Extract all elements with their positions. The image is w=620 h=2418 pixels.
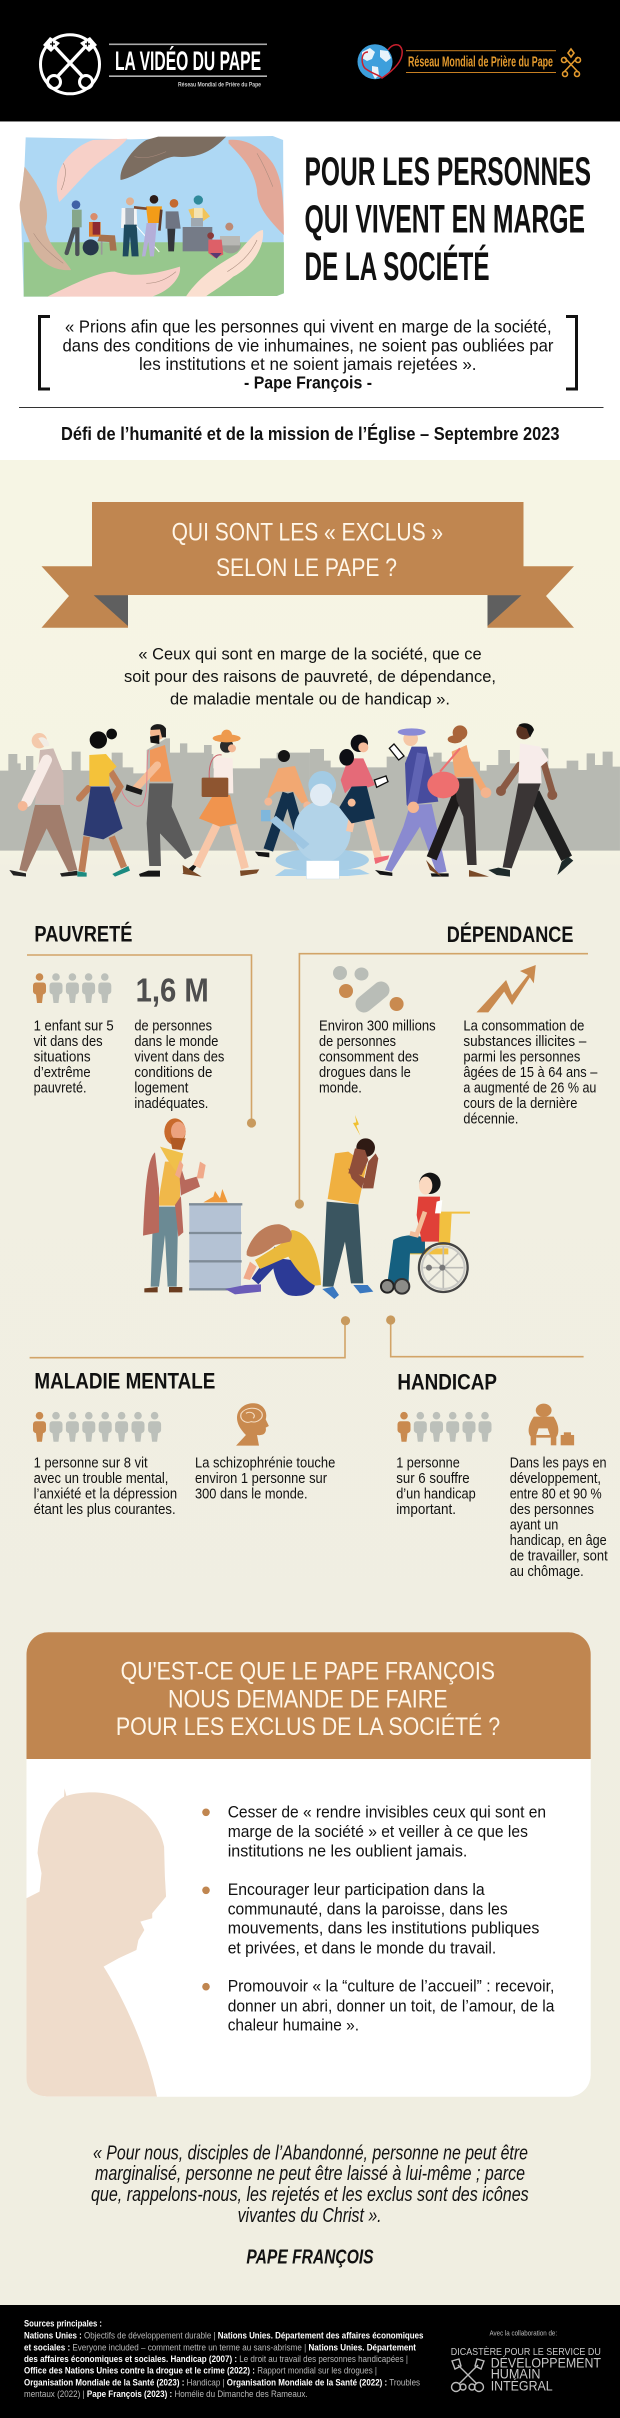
prayer quote in brackets <box>40 316 576 392</box>
text: unemployment: développement, <box>510 1470 601 1487</box>
partner: dicastery: INTÉGRAL <box>491 2378 553 2394</box>
bullet: encourage participation <box>202 1880 539 1957</box>
closing quote: PAPE FRANÇOIS <box>246 2246 374 2268</box>
text: drug users: monde. <box>319 1080 362 1097</box>
text: schizophrenia <box>195 1454 335 1502</box>
text: consumption increase: La consommation de <box>463 1018 584 1035</box>
logo: crossed keys <box>40 35 100 94</box>
text: consumption increase: a augmenté de 26 % au <box>463 1080 596 1097</box>
text: children in poverty <box>34 1018 114 1097</box>
figure: seated person with head on knees <box>225 1224 321 1296</box>
header band <box>0 0 620 122</box>
text: housing: logement <box>134 1080 189 1097</box>
text: one in six: important. <box>396 1501 456 1518</box>
title <box>304 150 591 289</box>
ribbon heading: QUI SONT LES « EXCLUS » <box>172 519 443 547</box>
sources <box>24 2319 424 2400</box>
text: consumption increase <box>463 1018 598 1128</box>
person: older man <box>9 733 77 877</box>
text: one in eight: l’anxiété et la dépression <box>34 1485 177 1502</box>
person: woman with hat and bag <box>183 730 259 877</box>
bullet: culture of welcome <box>202 1977 555 2035</box>
text: housing: dans le monde <box>134 1033 218 1050</box>
person: woman in pink <box>339 735 389 864</box>
text: one in six: d’un handicap <box>396 1485 476 1502</box>
text: unemployment: de travailler, sont <box>510 1547 608 1564</box>
panel heading: QU'EST-CE QUE LE PAPE FRANÇOIS <box>121 1657 495 1685</box>
ribbon heading: SELON LE PAPE ? <box>216 554 397 582</box>
quote: who are the excluded <box>124 644 496 708</box>
text: children in poverty: d’extrême <box>34 1064 91 1081</box>
partner: dicastery: Avec la collaboration de: <box>490 2329 557 2338</box>
heading: pauvreté: PAUVRETÉ <box>34 922 132 947</box>
subtitle: monthly intention: Défi de l’humanité et de la mission de l’Église – Septembre 2023 <box>61 423 560 444</box>
text: consumption increase: substances illicites – <box>463 1033 587 1050</box>
sources: mentaux (2022) | Pape François (2023) : Homélie du Dimanche des Rameaux. <box>24 2389 308 2400</box>
text: housing: conditions de <box>134 1064 212 1081</box>
text: consumption increase: décennie. <box>463 1111 518 1128</box>
text: consumption increase: parmi les personnes <box>463 1049 580 1066</box>
illustration: city skyline <box>0 738 620 851</box>
text: one in eight <box>34 1454 177 1518</box>
bullet: stop making invisible <box>202 1802 546 1860</box>
text: drug users: drogues dans le <box>319 1064 411 1081</box>
icon: keys <box>452 2359 484 2392</box>
sources: Organisation Mondiale de la Santé (2023) : Handicap | Organisation Mondiale de la Santé (2022) : Troubles <box>24 2377 420 2388</box>
text: unemployment: des personnes <box>510 1501 594 1518</box>
heading: maladie mentale: MALADIE MENTALE <box>34 1368 215 1393</box>
closing quote: que, rappelons-nous, les rejetés et les exclus sont des icônes <box>91 2184 529 2206</box>
section: poverty <box>27 922 256 1128</box>
heading: handicap: HANDICAP <box>397 1369 497 1394</box>
person: woman with red bag <box>426 725 491 877</box>
illustration: seated man in blue <box>261 771 370 879</box>
text: children in poverty: pauvreté. <box>34 1080 87 1097</box>
connector: mental illness line <box>30 1316 350 1358</box>
text: unemployment <box>510 1454 608 1580</box>
person: man in white t-shirt <box>488 723 573 877</box>
figure: homeless man and barrel <box>143 1118 242 1292</box>
brand: La Vidéo du Pape <box>109 44 267 88</box>
bullet: encourage participation: communauté, dans la paroisse, dans les <box>228 1899 508 1918</box>
section: mental illness <box>30 1316 350 1518</box>
bullet: encourage participation: Encourager leur participation dans la <box>228 1880 485 1899</box>
pictogram: 1 in 6 <box>398 1412 492 1442</box>
panel heading: NOUS DEMANDE DE FAIRE <box>168 1685 448 1713</box>
icon: rising arrow <box>476 965 536 1012</box>
bullet: encourage participation: mouvements, dans les institutions publiques <box>228 1919 539 1938</box>
text: drug users: consomment des <box>319 1049 419 1066</box>
text: unemployment: au chômage. <box>510 1563 584 1580</box>
bullet: encourage participation: et privées, et dans le monde du travail. <box>228 1938 496 1957</box>
panel heading: POUR LES EXCLUS DE LA SOCIÉTÉ ? <box>116 1712 500 1741</box>
text: housing: inadéquates. <box>134 1095 208 1112</box>
text: drug users <box>319 1018 436 1097</box>
bullet: culture of welcome: Promouvoir « la “culture de l’accueil” : recevoir, <box>228 1977 554 1996</box>
bullet: culture of welcome: donner un abri, donner un toit, de l’amour, de la <box>228 1996 555 2015</box>
text: unemployment: ayant un <box>510 1516 558 1533</box>
text: consumption increase: cours de la dernière <box>463 1095 577 1112</box>
icon: pills <box>333 966 404 1011</box>
footer <box>0 2305 620 2418</box>
icon: person with suitcase <box>529 1404 574 1445</box>
person: bearded man with phone <box>122 724 202 877</box>
panel: what the Pope asks <box>26 1632 591 2097</box>
person: woman in yellow <box>77 729 130 877</box>
text: drug users: de personnes <box>319 1033 396 1050</box>
text: housing: vivent dans des <box>134 1049 224 1066</box>
text: one in eight: étant les plus courantes. <box>34 1501 176 1518</box>
text: children in poverty: situations <box>34 1049 91 1066</box>
closing quote: marginalisé, personne ne peut être laissé à lui-même ; parce <box>95 2163 525 2185</box>
section: addiction <box>295 922 598 1209</box>
illustration: four excluded people <box>143 1115 470 1299</box>
connector: addiction line <box>295 954 588 1209</box>
text: schizophrenia: La schizophrénie touche <box>195 1454 335 1471</box>
quote: who are the excluded: « Ceux qui sont en marge de la société, que ce <box>138 644 482 663</box>
figure: man holding head <box>322 1115 378 1299</box>
person: man with hat and phone <box>375 728 449 877</box>
prayer quote in brackets: dans des conditions de vie inhumaines, ne soient pas oubliées par <box>62 335 554 355</box>
bullet: stop making invisible: Cesser de « rendre invisibles ceux qui sont en <box>228 1802 546 1821</box>
bullet: stop making invisible: marge de la société » et veiller à ce que les <box>228 1822 528 1841</box>
partner: dicastery <box>451 2329 601 2394</box>
panel heading <box>26 1632 591 1759</box>
logo: globe and heart <box>358 44 402 79</box>
pictogram: 1 in 5 <box>33 973 111 1003</box>
prayer quote in brackets: les institutions et ne soient jamais rejetées ». <box>139 354 476 374</box>
text: unemployment: entre 80 et 90 % <box>510 1485 602 1502</box>
sources: Office des Nations Unies contre la drogue et le crime (2022) : Rapport mondial sur les drogues | <box>24 2366 377 2377</box>
text: one in six: 1 personne <box>396 1454 460 1471</box>
sources: Nations Unies : Objectifs de développement durable | Nations Unies. Département des affaires économiques <box>24 2331 424 2342</box>
ribbon heading <box>42 502 574 628</box>
illustration: hands around people <box>20 136 284 297</box>
text: one in six <box>396 1454 476 1518</box>
big number: 1,6 M <box>136 972 209 1009</box>
heading: dépendance: DÉPENDANCE <box>447 922 573 947</box>
icon: head with brain <box>236 1403 269 1446</box>
silhouette: Pope Francis <box>26 1788 166 2097</box>
section: disability <box>386 1315 608 1580</box>
bullet: culture of welcome: chaleur humaine ». <box>228 2016 359 2035</box>
connector: disability line <box>386 1315 584 1357</box>
title: DE LA SOCIÉTÉ <box>304 244 490 289</box>
partner: dicastery: DÉVELOPPEMENT <box>491 2354 601 2370</box>
text: children in poverty: 1 enfant sur 5 <box>34 1018 114 1035</box>
text: one in eight: 1 personne sur 8 vit <box>34 1454 148 1471</box>
text: housing <box>134 1018 224 1112</box>
sources: Sources principales : <box>24 2319 102 2330</box>
illustration: walking people left <box>9 724 311 877</box>
text: schizophrenia: environ 1 personne sur <box>195 1470 327 1487</box>
icon: small keys <box>562 49 580 76</box>
text: drug users: Environ 300 millions <box>319 1018 436 1035</box>
pictogram: 1 in 8 <box>33 1412 161 1442</box>
figure: woman in wheelchair <box>381 1173 470 1294</box>
connector: poverty line <box>27 955 256 1128</box>
brand: La Vidéo du Pape: LA VIDÉO DU PAPE <box>115 45 261 76</box>
brand: La Vidéo du Pape: Réseau Mondial de Prière du Pape <box>178 82 261 88</box>
text: children in poverty: vit dans des <box>34 1033 103 1050</box>
quote: who are the excluded: de maladie mentale ou de handicap ». <box>170 689 450 708</box>
text: schizophrenia: 300 dans le monde. <box>195 1485 308 1502</box>
partner: dicastery: HUMAIN <box>491 2366 540 2382</box>
prayer quote in brackets: - Pape François - <box>244 372 372 392</box>
sources: et sociales : Everyone included – comment mettre un terme au sans-abrisme | Nations Unies. Département <box>24 2342 417 2353</box>
sources: des affaires économiques et sociales. Handicap (2007) : Le droit au travail des personnes handicapées | <box>24 2354 408 2365</box>
closing quote <box>91 2142 529 2268</box>
text: one in six: sur 6 souffre <box>396 1470 470 1487</box>
illustration: walking people right <box>339 723 573 877</box>
quote: who are the excluded: soit pour des raisons de pauvreté, de dépendance, <box>124 667 496 686</box>
closing quote: vivantes du Christ ». <box>238 2205 382 2227</box>
text: housing: de personnes <box>134 1018 212 1035</box>
text: one in eight: avec un trouble mental, <box>34 1470 168 1487</box>
bullet: stop making invisible: institutions ne les oublient jamais. <box>228 1841 467 1860</box>
person: boy in orange <box>255 750 311 857</box>
prayer quote in brackets: « Prions afin que les personnes qui vivent en marge de la société, <box>65 317 552 337</box>
text: consumption increase: âgées de 15 à 64 ans – <box>463 1064 598 1081</box>
